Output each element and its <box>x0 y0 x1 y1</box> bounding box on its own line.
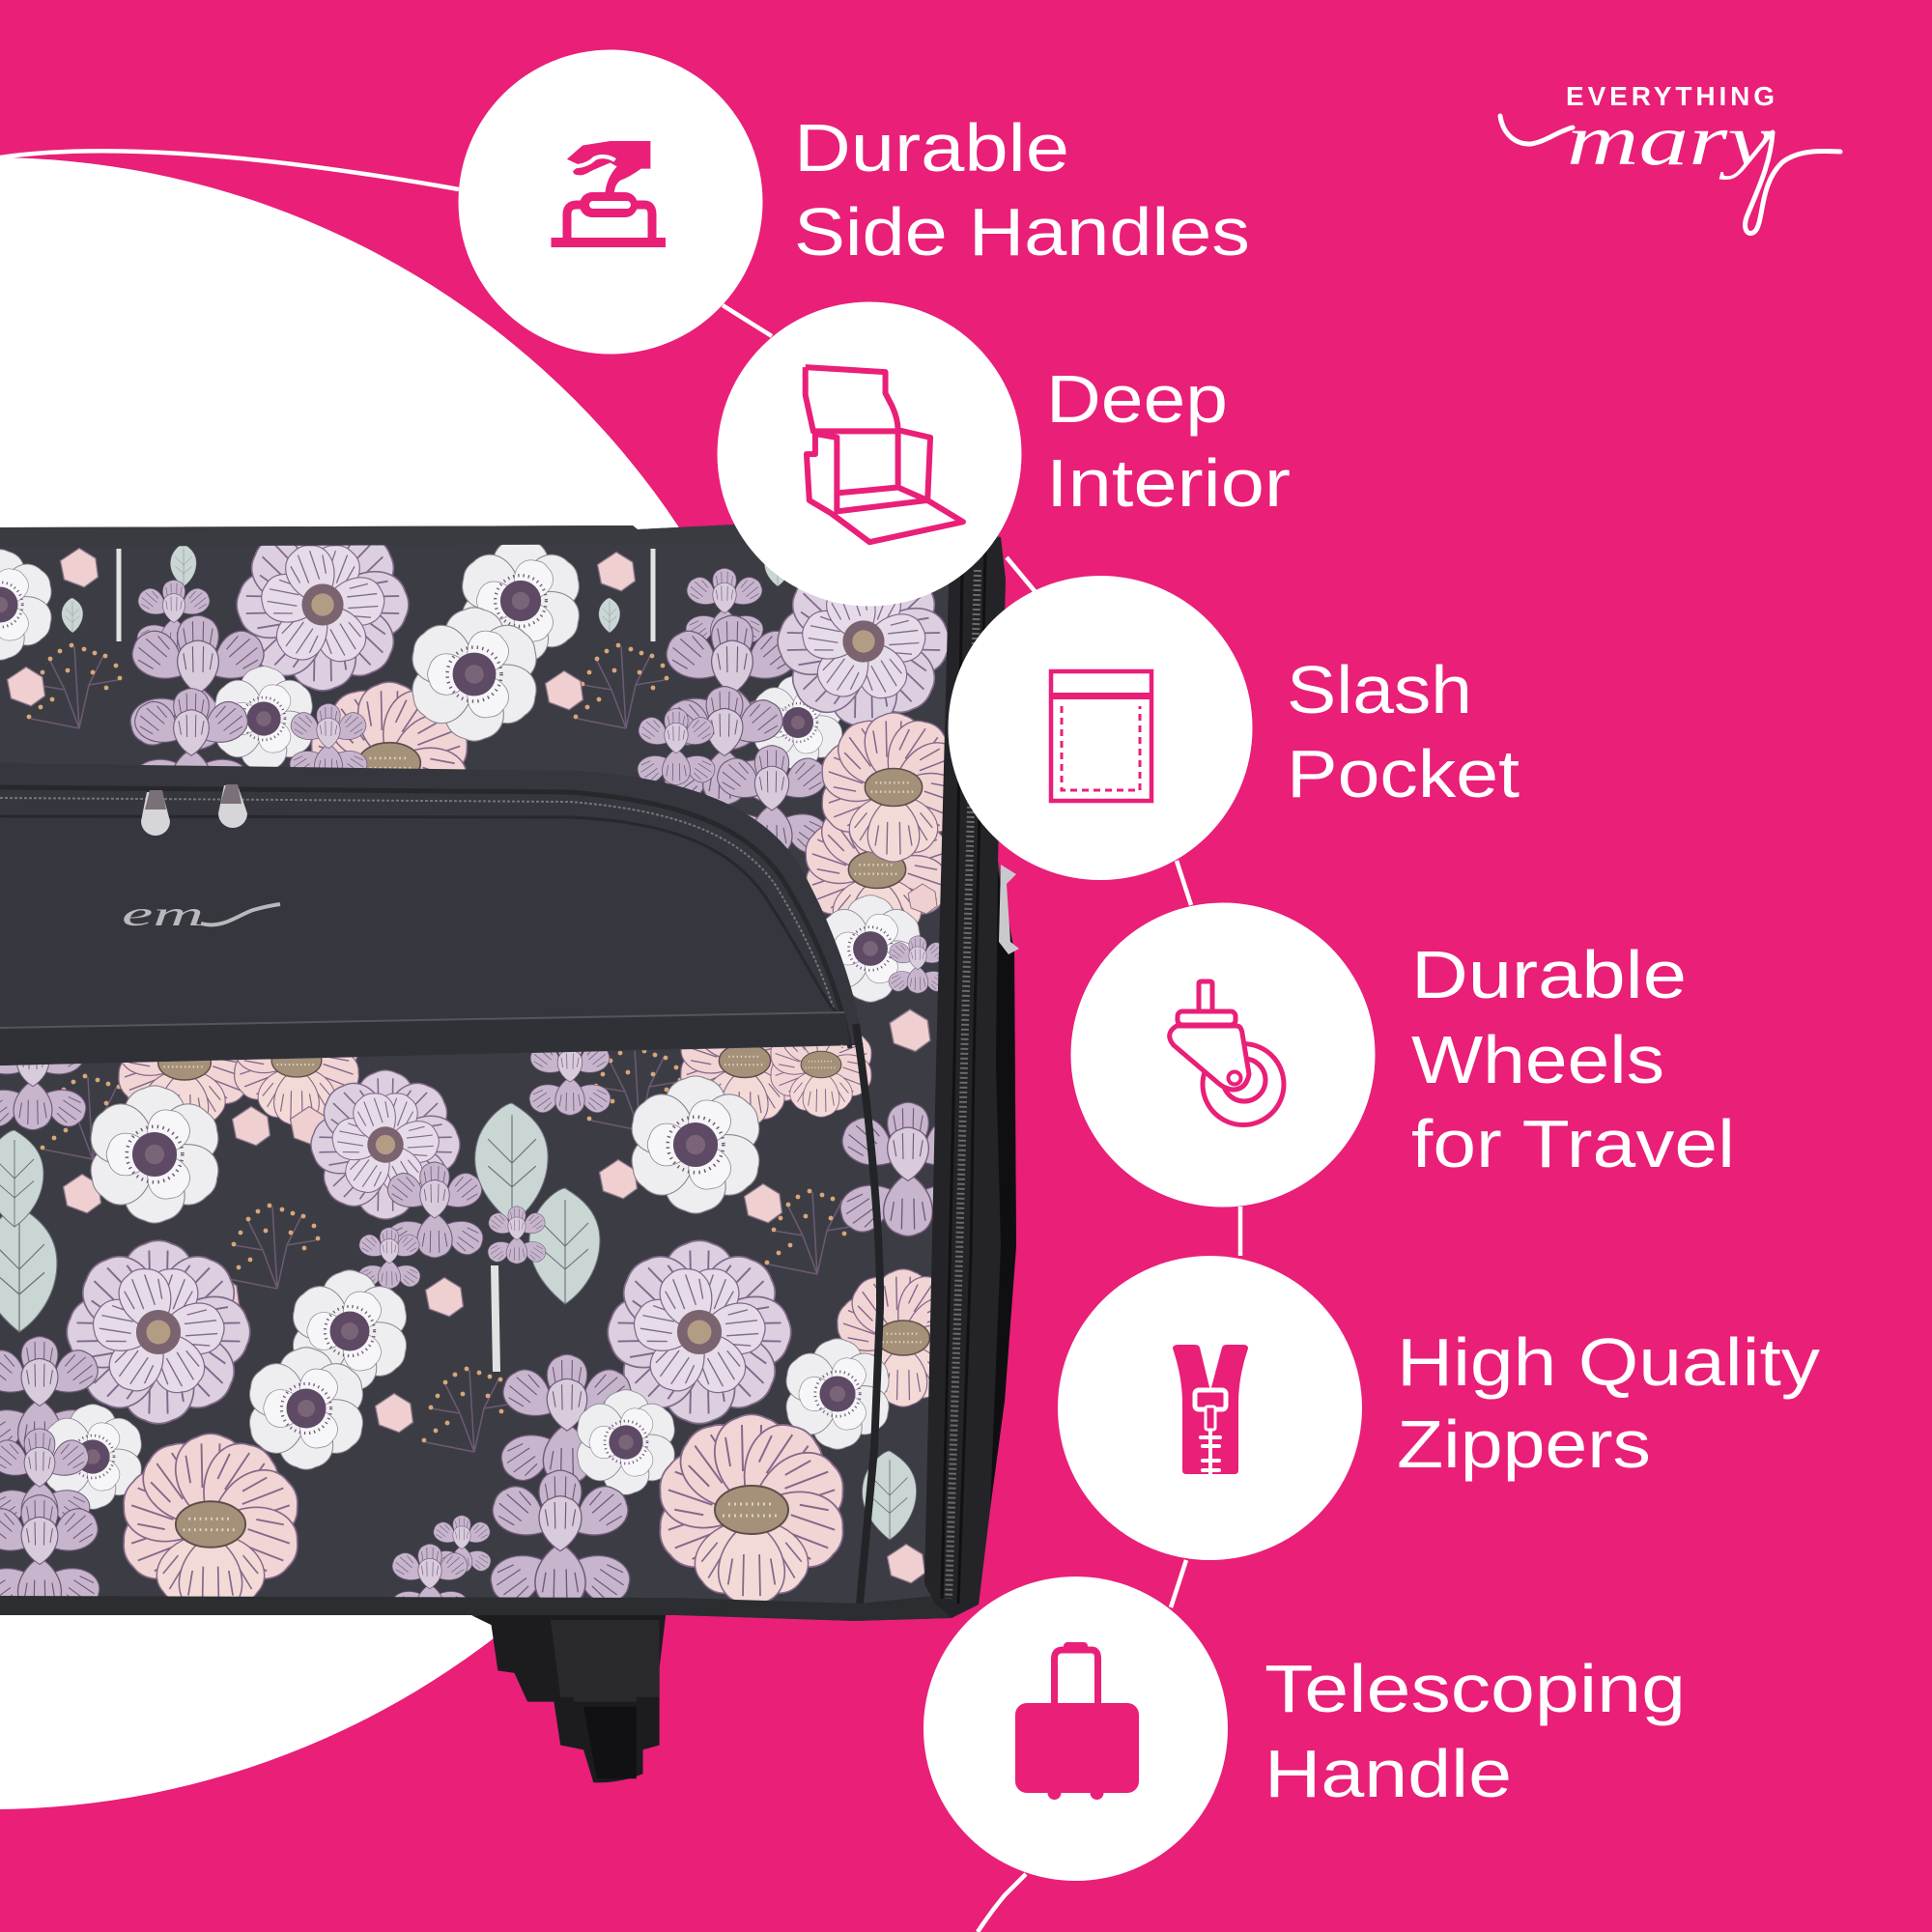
label: Deep Interior <box>1046 361 1291 521</box>
bag wheels <box>471 1613 666 1782</box>
label: Telescoping Handle: Handle <box>1264 1736 1512 1811</box>
side zipper panel <box>924 537 1019 1618</box>
label: High Quality Zippers: Zippers <box>1397 1406 1651 1482</box>
feature circle: slash pocket <box>949 576 1252 880</box>
floral print, upper panel <box>0 519 974 1051</box>
icon: pocket <box>1051 671 1151 801</box>
label: Deep Interior: Deep <box>1046 361 1228 437</box>
icon: caster wheel <box>1170 981 1284 1124</box>
label: Durable Wheels for Travel <box>1411 937 1735 1181</box>
connector lines between feature circles <box>0 151 1240 1932</box>
feature circle: high quality zippers <box>1058 1256 1362 1560</box>
rolling bag product illustration <box>0 519 1019 1782</box>
floral print, lower panel <box>0 991 984 1623</box>
metal brand badge: em <box>122 895 204 933</box>
label: Telescoping Handle <box>1264 1651 1686 1811</box>
label: Durable Wheels for Travel: Durable <box>1411 937 1687 1012</box>
icon: hand gripping handle <box>551 141 666 247</box>
feature circle: telescoping handle <box>923 1577 1228 1881</box>
label: Durable Wheels for Travel: Wheels <box>1411 1022 1664 1097</box>
white background circle <box>0 157 816 1809</box>
icon: rolling luggage <box>1015 1642 1139 1800</box>
label: High Quality Zippers: High Quality <box>1397 1324 1820 1400</box>
icon: zipper <box>1173 1345 1248 1474</box>
label: Deep Interior: Interior <box>1046 445 1291 521</box>
top band of bag <box>0 525 966 547</box>
label: Durable Side Handles: Side Handles <box>794 194 1250 270</box>
label: Slash Pocket: Slash <box>1287 652 1472 727</box>
logo: Everything Mary: EVERYTHING <box>1566 81 1775 111</box>
icon: open bag interior <box>806 367 963 542</box>
logo: Everything Mary: mary <box>1567 101 1772 181</box>
label: Telescoping Handle: Telescoping <box>1264 1651 1686 1726</box>
label: Slash Pocket: Pocket <box>1287 736 1520 811</box>
metal brand badge <box>122 895 280 933</box>
bag body <box>0 525 1016 1621</box>
feature circle: durable wheels <box>1070 902 1376 1208</box>
front pocket <box>0 763 880 1604</box>
label: Durable Side Handles: Durable <box>794 110 1069 185</box>
label: High Quality Zippers <box>1397 1324 1820 1482</box>
zipper pulls <box>141 784 247 836</box>
label: Durable Side Handles <box>794 110 1250 270</box>
label: Durable Wheels for Travel: for Travel <box>1411 1106 1735 1181</box>
feature circle: deep interior <box>717 301 1022 607</box>
bottom band of bag <box>0 1594 952 1621</box>
logo: Everything Mary <box>1500 81 1840 234</box>
feature circle: durable side handles <box>458 50 763 354</box>
label: Slash Pocket <box>1287 652 1520 811</box>
